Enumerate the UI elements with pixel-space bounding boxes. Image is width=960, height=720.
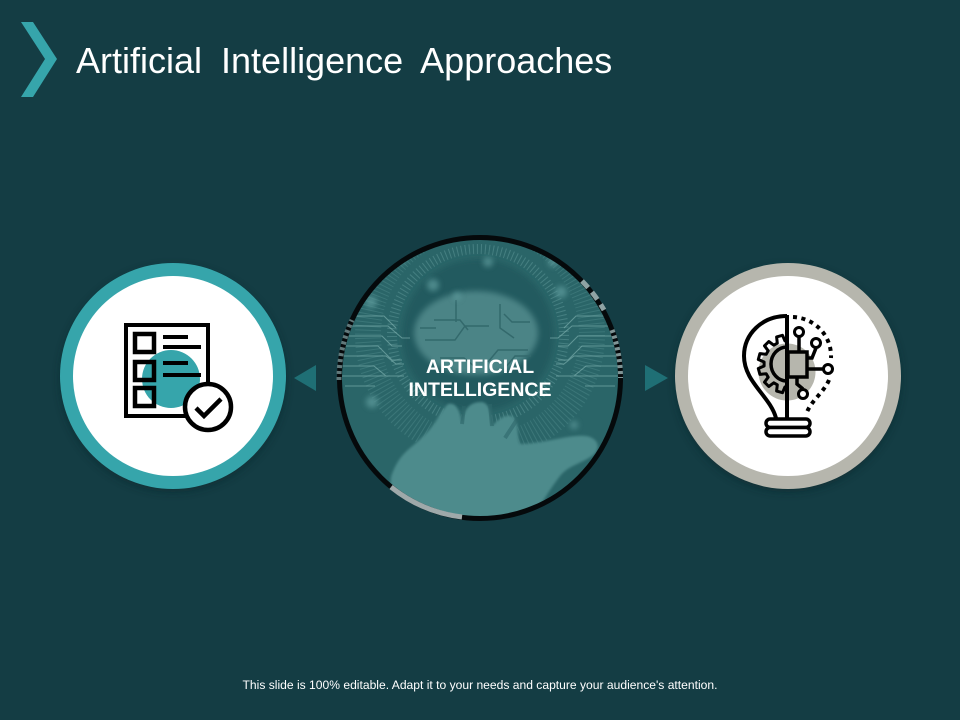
heading: artificial intelligence label: ARTIFICIAL xyxy=(426,356,534,378)
panel: left circle with checklist icon xyxy=(60,263,286,492)
heading: artificial intelligence label: INTELLIGENCE xyxy=(408,379,552,401)
image: glow band, halo and brain xyxy=(368,223,592,447)
icon: title chevron xyxy=(21,22,57,97)
arrow: right pointing triangle xyxy=(645,365,668,391)
panel: right circle with light bulb icon xyxy=(675,263,901,492)
text block: footer note: This slide is 100% editable. Adapt it to your needs and capture your audience's attention. xyxy=(243,678,717,692)
panel: central AI image circle xyxy=(338,223,622,525)
title: Artificial Intelligence Approaches xyxy=(76,40,612,81)
image: hand xyxy=(388,402,598,525)
central circle ring xyxy=(339,238,620,518)
image: circuit traces xyxy=(338,316,622,386)
arrow: left pointing triangle xyxy=(294,365,316,391)
heading: artificial intelligence label xyxy=(408,356,552,401)
icon: AI light bulb with gear and circuit xyxy=(744,315,832,436)
icon: checklist with check badge xyxy=(126,325,231,430)
image: glowing bokeh dots xyxy=(365,250,578,429)
